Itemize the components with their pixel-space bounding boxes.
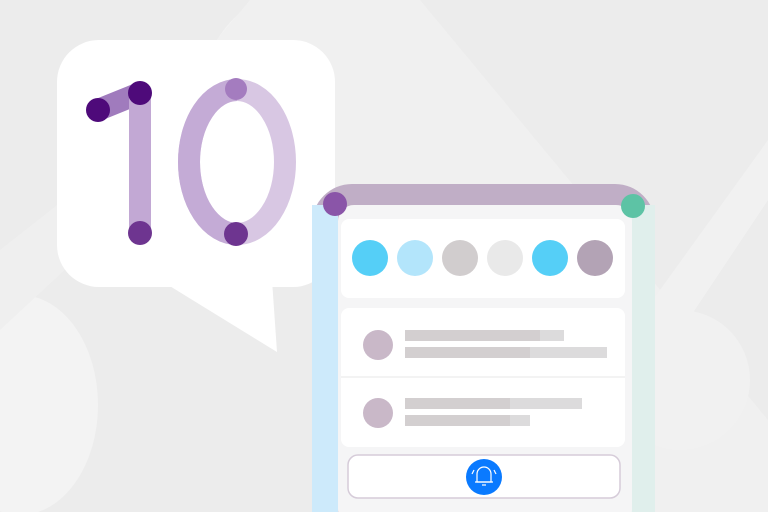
button with bell icon	[348, 455, 620, 498]
phone mockup	[312, 184, 655, 512]
card: list items	[341, 308, 625, 447]
number 10 graphic	[86, 78, 285, 246]
corner dots	[323, 192, 347, 216]
card: color swatches	[341, 219, 625, 298]
speech bubble with number 10	[57, 40, 335, 352]
